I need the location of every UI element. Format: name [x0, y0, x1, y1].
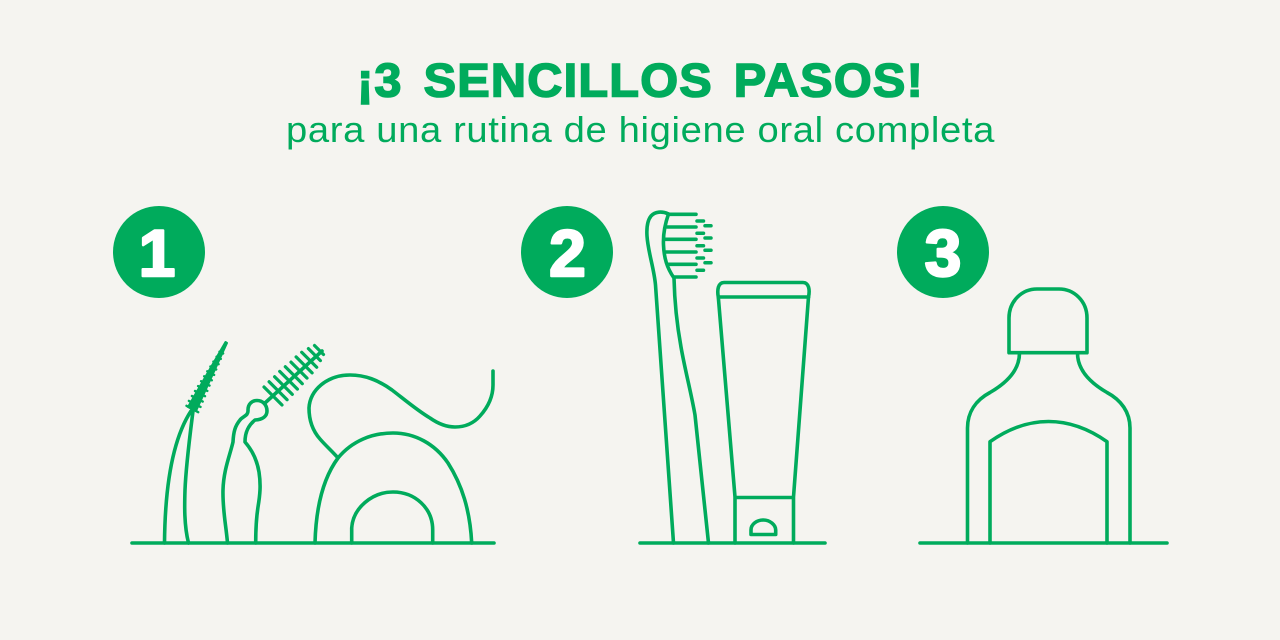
- step 2 badge: 2: [549, 216, 586, 290]
- step 3 badge: [897, 206, 989, 298]
- icon: bottle cap: [1009, 289, 1087, 353]
- icon: dental floss: [309, 371, 493, 543]
- subtitle: para una rutina de higiene oral completa: [286, 109, 995, 150]
- illustration: step 3 mouthwash bottle: [920, 289, 1167, 543]
- step 1 badge: [113, 206, 205, 298]
- illustration: step 1 dental tools: [132, 342, 494, 543]
- icon: interdental brush: [223, 346, 324, 543]
- title: ¡3 SENCILLOS PASOS!: [357, 54, 924, 108]
- shelf line 3: [920, 541, 1167, 545]
- icon: toothpaste tube: [718, 282, 809, 543]
- step 2 badge: [521, 206, 613, 298]
- icon: bottle body: [968, 353, 1130, 543]
- step 3 badge: 3: [925, 216, 961, 290]
- step 1 badge: 1: [139, 216, 175, 290]
- icon: thin interdental pick: [164, 342, 227, 543]
- illustration: step 2 toothbrush and toothpaste: [640, 212, 825, 543]
- shelf line 1: [132, 541, 494, 545]
- icon: bottle label: [990, 422, 1107, 543]
- shelf line 2: [640, 541, 825, 545]
- icon: toothbrush: [647, 212, 711, 543]
